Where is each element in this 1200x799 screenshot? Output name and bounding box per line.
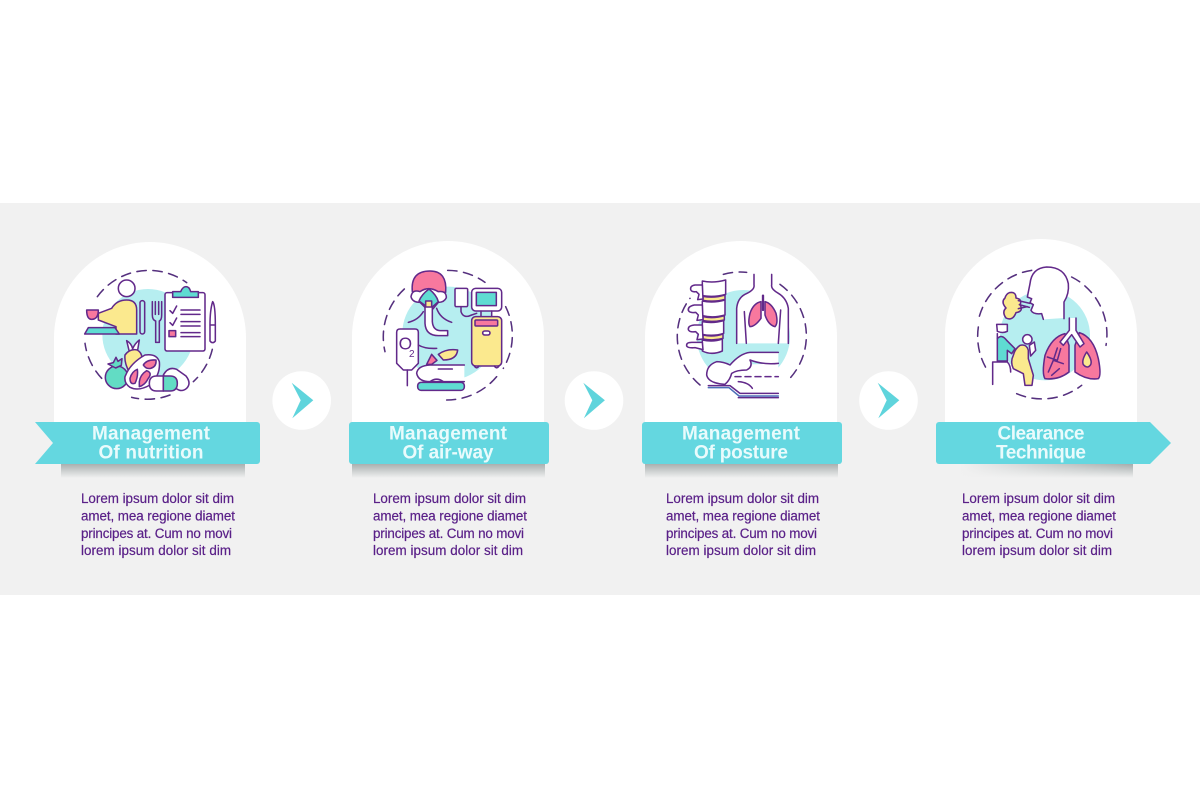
body text: principes at. Cum no movi (373, 526, 524, 541)
icon: spine, lungs and lying patient (677, 272, 806, 398)
heading (92, 424, 211, 464)
body text: Lorem ipsum dolor sit dim (666, 491, 819, 506)
banner (349, 422, 549, 464)
body text: amet, mea regione diamet (666, 508, 820, 524)
icon: food and meal plan (85, 270, 215, 399)
arrow badge 2 (565, 371, 623, 430)
body text: Lorem ipsum dolor sit dim (81, 491, 234, 506)
body text: principes at. Cum no movi (666, 526, 817, 541)
body text (962, 491, 1116, 558)
panel: management of air-way (349, 241, 549, 558)
heading: Management (389, 424, 508, 444)
heading: Of nutrition (98, 442, 204, 464)
body text: lorem ipsum dolor sit dim (666, 543, 816, 558)
heading: Clearance (998, 424, 1084, 444)
heading: Management (682, 424, 801, 444)
banner shadow (645, 464, 838, 478)
icon: ventilator and oxygen (383, 270, 512, 400)
background band (0, 203, 1200, 595)
body text: lorem ipsum dolor sit dim (373, 543, 523, 558)
heading: Management (92, 424, 211, 444)
heading: Technique (996, 442, 1086, 464)
body text: amet, mea regione diamet (373, 508, 527, 524)
ribbon banner (936, 422, 1171, 464)
body text: Lorem ipsum dolor sit dim (373, 491, 526, 506)
body text (81, 491, 235, 558)
body text: amet, mea regione diamet (81, 508, 235, 524)
banner shadow (352, 464, 545, 478)
panel: clearance technique (936, 239, 1171, 558)
body text: lorem ipsum dolor sit dim (962, 543, 1112, 558)
arch card (352, 241, 544, 423)
body text (666, 491, 820, 558)
panel: management of posture (642, 241, 842, 558)
icon: ventilator and oxygen: 2 (409, 349, 415, 360)
arch card (645, 241, 837, 423)
heading: Of air-way (402, 442, 494, 464)
panel: management of nutrition (35, 242, 260, 558)
arrow badge 1 (272, 371, 331, 430)
body text: Lorem ipsum dolor sit dim (962, 491, 1115, 506)
arch card (54, 242, 246, 423)
heading (996, 424, 1086, 464)
banner shadow (61, 464, 245, 478)
heading: Of posture (694, 442, 788, 464)
banner shadow (960, 464, 1133, 478)
banner (642, 422, 842, 464)
body text: lorem ipsum dolor sit dim (81, 543, 231, 558)
icon: ventilator and oxygen: O (399, 334, 412, 354)
heading (389, 424, 508, 464)
body text (373, 491, 527, 558)
ribbon banner (35, 422, 260, 464)
body text: amet, mea regione diamet (962, 508, 1116, 524)
heading (682, 424, 801, 464)
body text: principes at. Cum no movi (962, 526, 1113, 541)
icon: coughing and lungs (978, 267, 1107, 399)
body text: principes at. Cum no movi (81, 526, 232, 541)
arch card (945, 239, 1137, 423)
arrow badge 3 (859, 371, 918, 430)
